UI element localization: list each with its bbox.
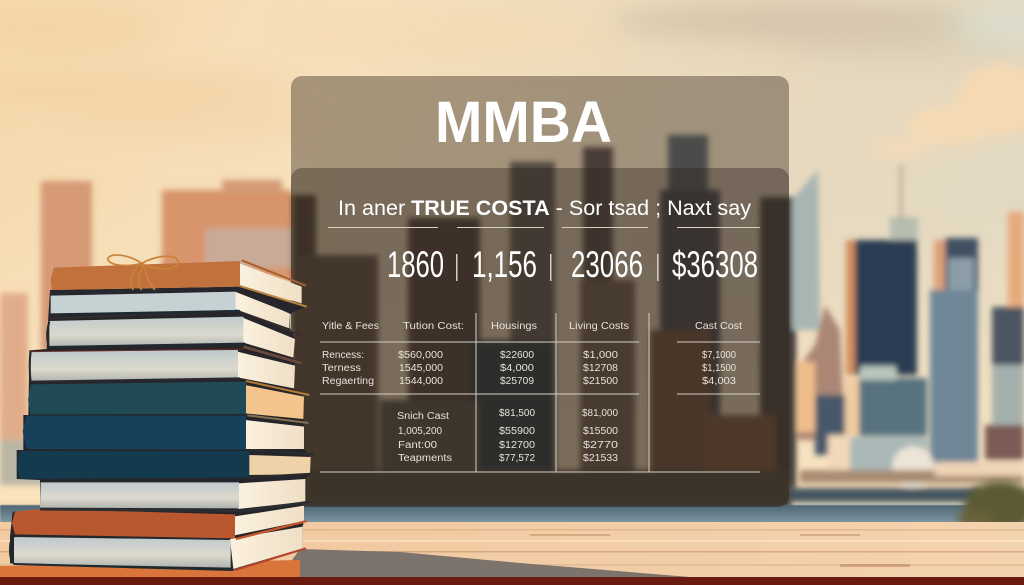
living costs column values: $12708: [583, 363, 618, 374]
housing column values: $22600: [500, 350, 534, 361]
housing column values: $12700: [499, 440, 535, 451]
living costs column values: $21533: [583, 453, 618, 464]
tuition column values: Snich Cast: [397, 411, 449, 422]
book 6 navy: [23, 415, 309, 450]
table row labels: Terness: [322, 363, 361, 374]
book 2 pale: [50, 288, 292, 328]
tuition column values: 1,005,200: [398, 426, 442, 437]
table header row: [322, 320, 742, 332]
right side towers: [792, 170, 820, 330]
table header row: Cast Cost: [695, 320, 742, 332]
stack of books: [10, 255, 314, 570]
book 4 pale: [30, 347, 302, 388]
subtitle: In aner TRUE COSTA - Sor tsad ; Naxt say: [338, 197, 751, 220]
book 9 red: [12, 506, 307, 539]
table row labels: Rencess:: [322, 350, 364, 361]
book 7 dark teal: [17, 450, 314, 479]
icon: ribbon bow: [108, 255, 178, 290]
tuition column values: Teapments: [398, 453, 452, 464]
wooden table: [0, 522, 1024, 585]
book 8 pale: [40, 479, 310, 511]
translucent outer panel: [291, 76, 789, 507]
table row labels: [322, 350, 374, 387]
cast cost column values: $1,1500: [702, 363, 736, 374]
cast cost column values: $7,1000: [702, 350, 736, 361]
living costs column values: [582, 350, 619, 464]
title: MMBA: [435, 90, 612, 155]
housing column values: $81,500: [499, 408, 535, 419]
living costs column values: $81,000: [582, 408, 618, 419]
housing column values: [499, 350, 535, 464]
tuition column values: 1545,000: [399, 363, 443, 374]
table header row: Living Costs: [569, 320, 629, 332]
book shadow on table: [280, 549, 690, 577]
tuition column values: [397, 350, 452, 464]
table header row: Tution Cost:: [403, 320, 464, 332]
subtitle underlines: [328, 226, 760, 228]
right cumulus cloud: [868, 64, 1024, 158]
headline numbers: 1860: [387, 244, 444, 285]
book 10 bottom: [10, 527, 306, 570]
dark backing between books: [10, 287, 311, 570]
translucent inner panel: [291, 168, 789, 507]
headline numbers: $36308: [672, 244, 758, 285]
blurred city skyline: [0, 135, 1024, 510]
living costs column values: $1,000: [583, 350, 618, 361]
horizon glow: [0, 200, 1024, 500]
water: [0, 505, 1024, 523]
headline numbers: [387, 244, 758, 285]
tuition column values: Fant:00: [398, 440, 437, 451]
tuition column values: 1544,000: [399, 376, 443, 387]
living costs column values: $21500: [583, 376, 618, 387]
table row labels: Regaerting: [322, 376, 374, 387]
table header row: Housings: [491, 320, 537, 332]
cast cost column values: [702, 350, 736, 387]
table header row: Yitle & Fees: [322, 320, 379, 332]
headline numbers: 1,156: [472, 244, 537, 285]
living costs column values: $15500: [583, 426, 618, 437]
housing column values: $77,572: [499, 453, 535, 464]
book 5 teal: [28, 381, 309, 419]
housing column values: $55900: [499, 426, 535, 437]
trees: [957, 481, 1024, 529]
book 3 pale: [47, 311, 301, 358]
clouds: [0, 3, 1024, 134]
headline numbers: 23066: [571, 244, 643, 285]
tuition column values: $560,000: [398, 350, 443, 361]
book 1 orange: [51, 260, 307, 307]
living costs column values: $2770: [583, 440, 619, 451]
towers seen through the panel: [292, 195, 316, 485]
cast cost column values: $4,003: [702, 376, 736, 387]
housing column values: $4,000: [500, 363, 534, 374]
table grid lines: [320, 313, 760, 472]
housing column values: $25709: [500, 376, 534, 387]
cost table: [320, 313, 760, 472]
